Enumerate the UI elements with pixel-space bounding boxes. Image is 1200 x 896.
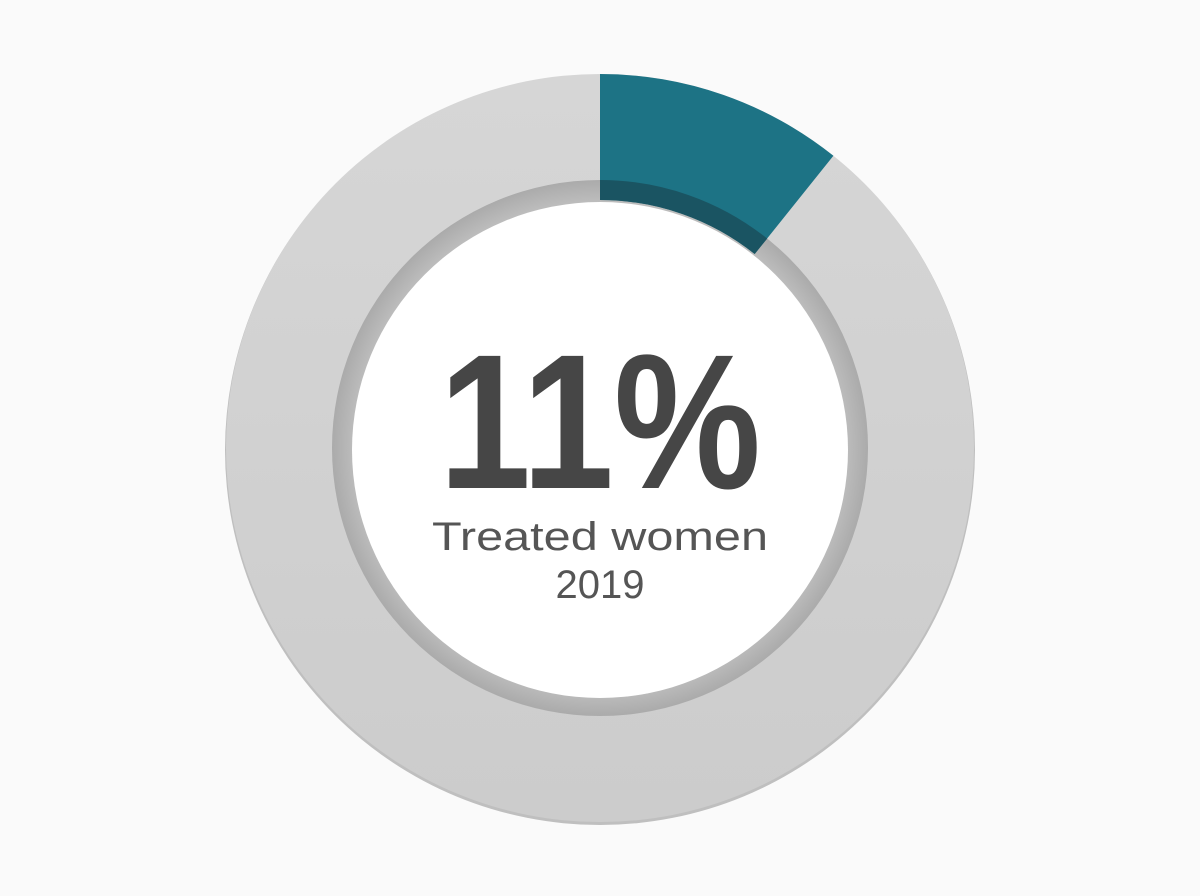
ring: remaining share <box>225 74 975 825</box>
big percentage: 11% <box>439 314 761 529</box>
ring segment: 11% treated <box>600 74 833 254</box>
inner white circle <box>352 202 848 698</box>
label: year: 2019 <box>556 563 644 607</box>
label: treated women: Treated women <box>432 515 768 559</box>
